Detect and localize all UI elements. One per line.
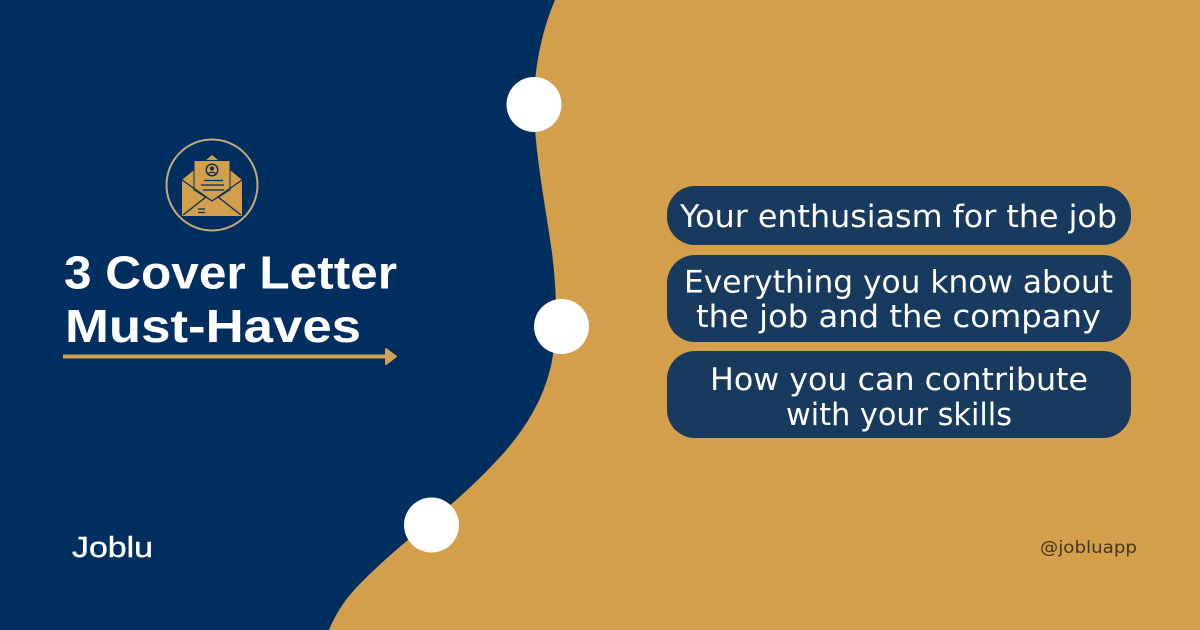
pill: enthusiasm: Your enthusiasm for the job [679,199,1117,235]
decorative circle: middle [534,299,589,354]
pill: knowledge: Everything you know about [684,264,1113,300]
title: 3 Cover Letter [64,246,397,298]
decorative circle: bottom [404,498,459,552]
panel: gold wave background [329,0,1200,630]
pill: knowledge [667,255,1131,342]
pill: knowledge: the job and the company [696,299,1101,335]
logo: Joblu: Joblu [72,532,153,564]
pill: skills: How you can contribute [710,362,1088,398]
social handle: @jobluapp [1040,538,1137,558]
title [64,246,397,352]
icon: envelope with resume [166,140,258,230]
decorative circle: top [506,77,562,132]
pill: skills: with your skills [786,397,1012,433]
arrow under title [63,349,396,364]
pill: enthusiasm [667,186,1131,245]
pill: skills [667,351,1131,438]
title: Must-Haves [65,300,361,352]
